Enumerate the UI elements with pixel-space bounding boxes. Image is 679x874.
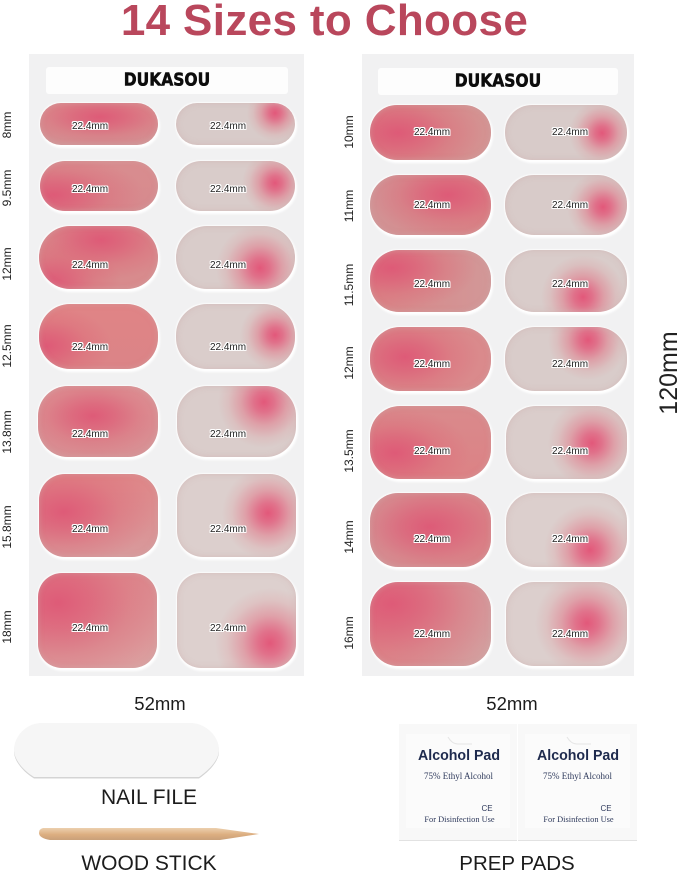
icon: nail file [14,723,219,778]
width labels: left sheet blush column: 22.4mm [210,184,246,195]
nail strip: 13.8mm solid [38,386,158,457]
nail strip: 12mm solid [370,327,491,391]
nail strip: 13.8mm blush [177,386,296,457]
width labels: left sheet blush column: 22.4mm [210,524,246,535]
pad 2 [518,724,637,841]
width labels: right sheet blush column: 22.4mm [552,629,588,640]
width labels: left sheet blush column [210,121,246,634]
brand label: DUKASOU [124,70,210,90]
size label: 12.5mm: 12.5mm [0,324,14,368]
sheet background [29,54,304,676]
nail strip: 12mm blush [176,226,295,289]
pad 1 [399,724,517,841]
panel: left nail sheet [29,54,304,676]
width labels: right sheet solid column [414,127,450,640]
width labels: right sheet blush column: 22.4mm [552,534,588,545]
size label: 11mm: 11mm [342,190,356,222]
width labels: right sheet solid column: 22.4mm [414,534,450,545]
nail strip: 9.5mm solid [40,161,158,211]
nail strip: 11.5mm blush [505,250,627,312]
size label: 11.5mm: 11.5mm [342,264,356,306]
nail strip: 12.5mm solid [39,304,158,369]
width labels: right sheet blush column: 22.4mm [552,446,588,457]
width labels: right sheet blush column: 22.4mm [552,279,588,290]
width labels: right sheet blush column [552,127,588,640]
pad 1: For Disinfection Use [424,815,495,824]
icon: wood stick [39,828,258,840]
size label: 15.8mm: 15.8mm [0,505,14,549]
width labels: right sheet solid column: 22.4mm [414,446,450,457]
nail strip: 15.8mm blush [177,474,296,557]
size label: 12mm: 12mm [0,247,14,281]
size label: 9.5mm: 9.5mm [0,170,14,206]
width labels: left sheet solid column: 22.4mm [72,524,108,535]
width labels: right sheet solid column: 22.4mm [414,359,450,370]
nail strip: 18mm blush [177,573,296,668]
nail strip: 13.5mm blush [506,406,627,479]
label: nail file: NAIL FILE [101,786,197,809]
size label: 8mm: 8mm [0,112,14,138]
sheet width label: left: 52mm [134,693,186,714]
width labels: left sheet blush column: 22.4mm [210,260,246,271]
nail strip: 14mm solid [370,493,491,567]
width labels: right sheet solid column: 22.4mm [414,127,450,138]
size label: 10mm: 10mm [342,115,356,149]
pad 1: 75% Ethyl Alcohol [424,771,493,781]
size label: 13.5mm: 13.5mm [342,429,356,473]
pad 2: CE [600,804,612,813]
width labels: left sheet solid column: 22.4mm [72,623,108,634]
nail strip: 16mm blush [506,582,627,666]
width labels: left sheet solid column: 22.4mm [72,184,108,195]
width labels: right sheet blush column: 22.4mm [552,127,588,138]
width labels: right sheet solid column: 22.4mm [414,279,450,290]
nail strip: 12mm blush [505,327,627,391]
width labels: left sheet solid column [72,121,108,634]
nail strip: 8mm solid [40,103,158,145]
width labels: right sheet solid column: 22.4mm [414,200,450,211]
width labels: left sheet solid column: 22.4mm [72,342,108,353]
size label: 18mm: 18mm [0,610,14,644]
nail strip: 13.5mm solid [370,406,491,479]
width labels: left sheet blush column: 22.4mm [210,623,246,634]
nail strip: 10mm blush [505,105,627,160]
pad 2: Alcohol Pad [537,748,619,764]
pad 2: For Disinfection Use [543,815,614,824]
nail strip: 18mm solid [38,573,157,668]
nail strip: 15.8mm solid [39,474,158,557]
size label: 14mm: 14mm [342,520,356,554]
width labels: left sheet solid column: 22.4mm [72,121,108,132]
width labels: left sheet blush column: 22.4mm [210,342,246,353]
width labels: right sheet blush column: 22.4mm [552,359,588,370]
nail strip: 14mm blush [506,493,627,567]
brand label: DUKASOU [455,71,541,91]
size label: 13.8mm: 13.8mm [0,410,14,454]
brand label [46,67,288,94]
panel: right nail sheet [362,54,634,676]
width labels: right sheet blush column: 22.4mm [552,200,588,211]
nail strip: 8mm blush [176,103,295,145]
nail strip: 9.5mm blush [176,161,295,211]
pad 1: Alcohol Pad [418,748,500,764]
size label: 16mm: 16mm [342,616,356,650]
width labels: left sheet blush column: 22.4mm [210,121,246,132]
width labels: left sheet blush column: 22.4mm [210,429,246,440]
nail strip: 16mm solid [370,582,491,666]
brand label [378,68,618,95]
sheet background [362,54,634,676]
icon: alcohol prep pads [399,736,637,841]
sheet width label: right: 52mm [486,693,538,714]
nail strip: 11.5mm solid [370,250,491,312]
width labels: left sheet solid column: 22.4mm [72,429,108,440]
nail strip: 12.5mm blush [176,304,295,369]
width labels: right sheet solid column: 22.4mm [414,629,450,640]
nail strip: 10mm solid [370,105,491,160]
pad 2: 75% Ethyl Alcohol [543,771,612,781]
width labels: left sheet solid column: 22.4mm [72,260,108,271]
nail strip: 11mm blush [505,175,627,235]
nail strip: 11mm solid [370,175,491,235]
size label: 12mm: 12mm [342,346,356,380]
pad 1: CE [481,804,493,813]
nail strip: 12mm solid [39,226,158,289]
